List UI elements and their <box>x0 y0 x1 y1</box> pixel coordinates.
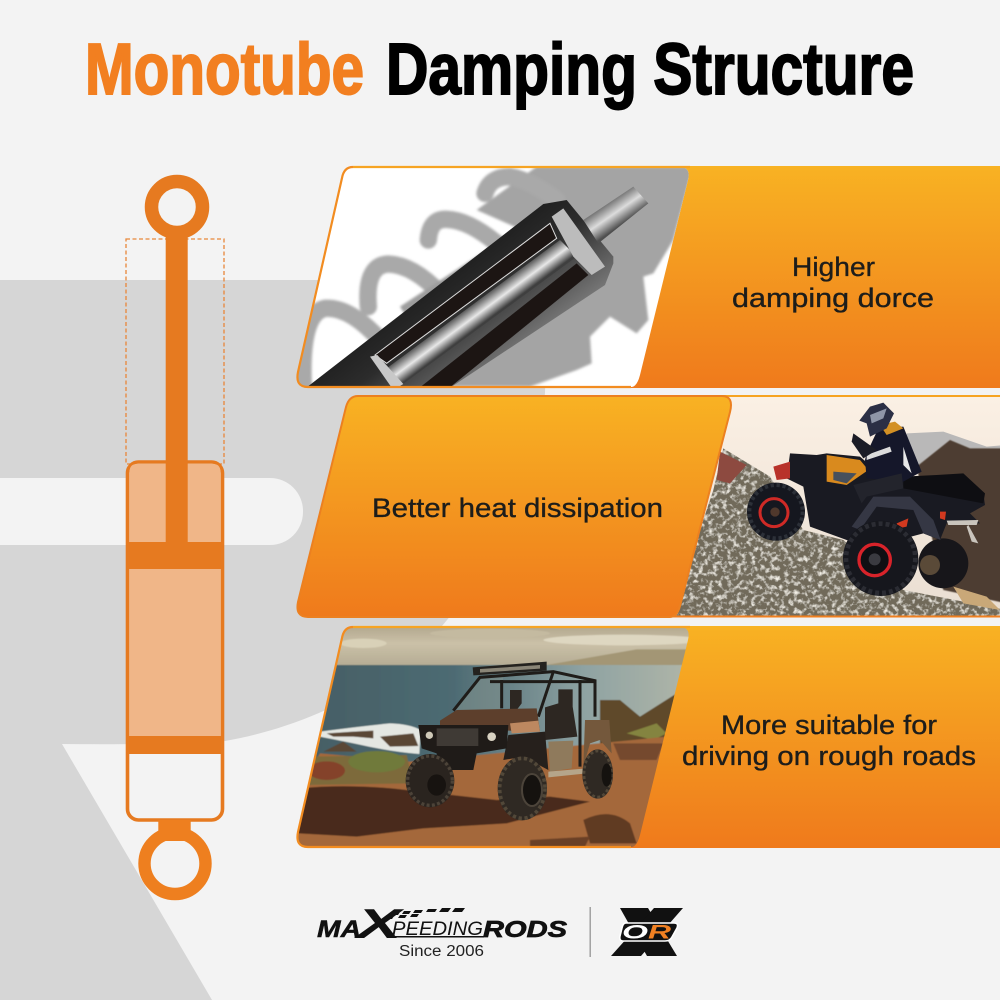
rear fender <box>852 497 941 540</box>
end cap <box>552 208 605 275</box>
rear wheel <box>582 749 613 799</box>
title: Monotube <box>85 30 364 110</box>
roof rack <box>473 662 547 675</box>
panel: better heat dissipation <box>297 396 1000 620</box>
photo border <box>297 167 631 387</box>
logo: maXpeedingRods <box>317 900 568 960</box>
rider helmet <box>859 403 894 437</box>
logo: maXpeedingRods: PEEDING <box>392 919 483 940</box>
roll cage <box>453 672 595 767</box>
logo: maXpeedingRods: MA <box>317 916 361 943</box>
front wheel <box>747 483 805 541</box>
logo: X OR badge: R <box>648 922 671 944</box>
tank <box>827 455 868 485</box>
tagline: Since 2006 <box>399 943 484 960</box>
seats <box>510 689 577 740</box>
dirt ground <box>290 737 667 850</box>
photo border <box>297 627 631 847</box>
label: damping dorce <box>732 283 934 313</box>
left front wheel <box>406 754 454 807</box>
label <box>682 710 976 771</box>
shock body <box>128 462 222 820</box>
piston rod <box>166 232 188 544</box>
bottom eye ring <box>144 820 206 894</box>
label: More suitable for <box>721 710 937 740</box>
central piston rod <box>387 240 577 385</box>
far rear wheel <box>918 538 968 588</box>
shock absorber diagram <box>126 182 224 894</box>
label: driving on rough roads <box>682 741 976 771</box>
checkered flag <box>386 908 465 919</box>
label: Better heat dissipation <box>372 493 663 523</box>
photo frame lines <box>700 395 1000 397</box>
photo: quad bike on rocks <box>660 396 1000 620</box>
top eye ring <box>152 182 202 232</box>
panel: rough roads <box>290 620 1000 850</box>
logo: maXpeedingRods: X <box>354 900 406 947</box>
lower oil chamber <box>417 263 588 390</box>
photo: off-road buggy on coast <box>298 628 689 847</box>
rear body <box>583 720 612 767</box>
rider torso <box>865 427 922 482</box>
photo: cutaway shock tube <box>298 168 689 387</box>
label: Higher <box>792 252 875 282</box>
upper oil chamber <box>375 223 557 363</box>
rear wheel <box>843 521 918 596</box>
side panel <box>503 732 548 770</box>
logo: maXpeedingRods: RODS <box>483 916 568 942</box>
hood <box>440 708 540 732</box>
right front wheel <box>498 756 547 820</box>
front grille <box>418 725 508 770</box>
logo: X OR badge: O <box>622 922 648 944</box>
divider <box>590 907 591 957</box>
luggage bag <box>903 473 985 503</box>
orange text plate <box>297 396 731 617</box>
protruding shaft <box>583 187 648 243</box>
exhaust <box>947 520 978 543</box>
label <box>732 252 934 313</box>
panel: higher damping force <box>290 160 1000 395</box>
tube casing <box>303 200 613 390</box>
title <box>85 30 914 110</box>
dashed travel outline <box>126 239 224 464</box>
red frame accents <box>897 512 946 528</box>
logo: X OR badge <box>611 908 683 956</box>
quad body <box>787 453 985 547</box>
windshield <box>453 677 503 711</box>
